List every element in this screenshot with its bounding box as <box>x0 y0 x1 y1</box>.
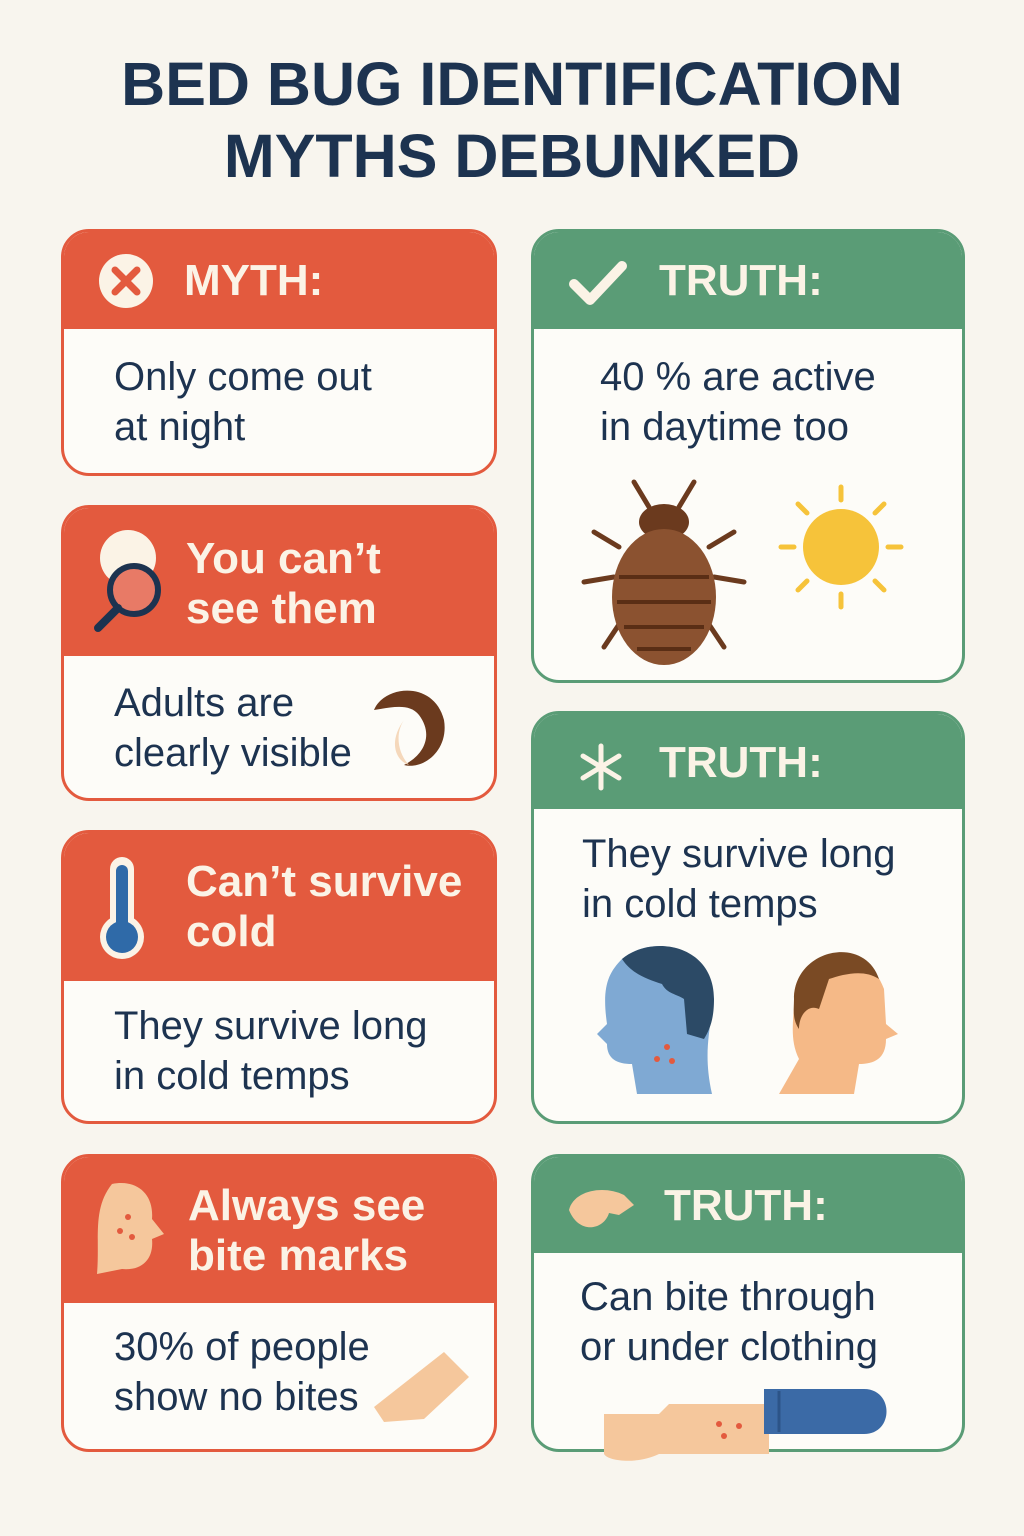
panel: myth bites: 30% of people <box>114 1325 370 1369</box>
panel: truth clothing: Can bite through <box>580 1275 876 1319</box>
icon: face <box>97 1183 164 1274</box>
panel: truth daytime <box>531 229 965 683</box>
panel: myth cold: in cold temps <box>114 1054 350 1098</box>
title: BED BUG IDENTIFICATION <box>121 50 903 118</box>
icon: snowflake <box>580 744 622 790</box>
icon: magnifier <box>94 530 161 632</box>
panel: truth clothing: TRUTH: <box>664 1181 828 1230</box>
panel: myth bites: show no bites <box>114 1375 359 1419</box>
panel: myth night <box>61 229 497 476</box>
panel: truth daytime: 40 % are active <box>600 355 876 399</box>
panel: truth cold: They survive long <box>582 832 895 876</box>
icon: tan head <box>779 952 898 1094</box>
icon: bed bug <box>582 480 746 665</box>
icon: arm with sleeve <box>604 1389 886 1461</box>
panel: myth bites: Always see <box>188 1181 425 1230</box>
icon: bug shape <box>374 690 445 766</box>
panel: truth clothing: or under clothing <box>580 1325 878 1369</box>
panel: truth cold: TRUTH: <box>659 738 823 787</box>
panel: myth bites: bite marks <box>188 1231 408 1280</box>
icon: sun <box>778 484 904 610</box>
icon: check <box>569 261 627 305</box>
panel: truth daytime: TRUTH: <box>659 256 823 305</box>
panel: myth cold <box>61 830 497 1124</box>
panel: truth cold <box>531 711 965 1124</box>
icon: hand <box>569 1190 634 1228</box>
panel: myth see: see them <box>186 584 377 633</box>
panel: myth see: You can’t <box>186 534 381 583</box>
text: at night <box>114 405 245 449</box>
panel: truth cold: in cold temps <box>582 882 818 926</box>
icon: x circle <box>99 254 153 308</box>
header: MYTH: <box>184 256 323 305</box>
title: MYTHS DEBUNKED <box>224 122 800 190</box>
panel: myth bites <box>61 1154 497 1452</box>
panel: myth see: clearly visible <box>114 731 352 775</box>
panel: myth see <box>61 505 497 801</box>
icon: blue head <box>597 946 714 1094</box>
panel: myth see: Adults are <box>114 681 294 725</box>
panel: truth clothing <box>531 1154 965 1452</box>
panel: truth daytime: in daytime too <box>600 405 849 449</box>
panel: myth cold: They survive long <box>114 1004 427 1048</box>
icon: thermometer <box>100 857 144 959</box>
icon: arm <box>374 1352 469 1422</box>
panel: myth cold: cold <box>186 907 276 956</box>
text: Only come out <box>114 355 372 399</box>
panel: myth cold: Can’t survive <box>186 857 462 906</box>
title <box>121 50 903 190</box>
header <box>64 232 494 329</box>
text <box>114 355 372 449</box>
